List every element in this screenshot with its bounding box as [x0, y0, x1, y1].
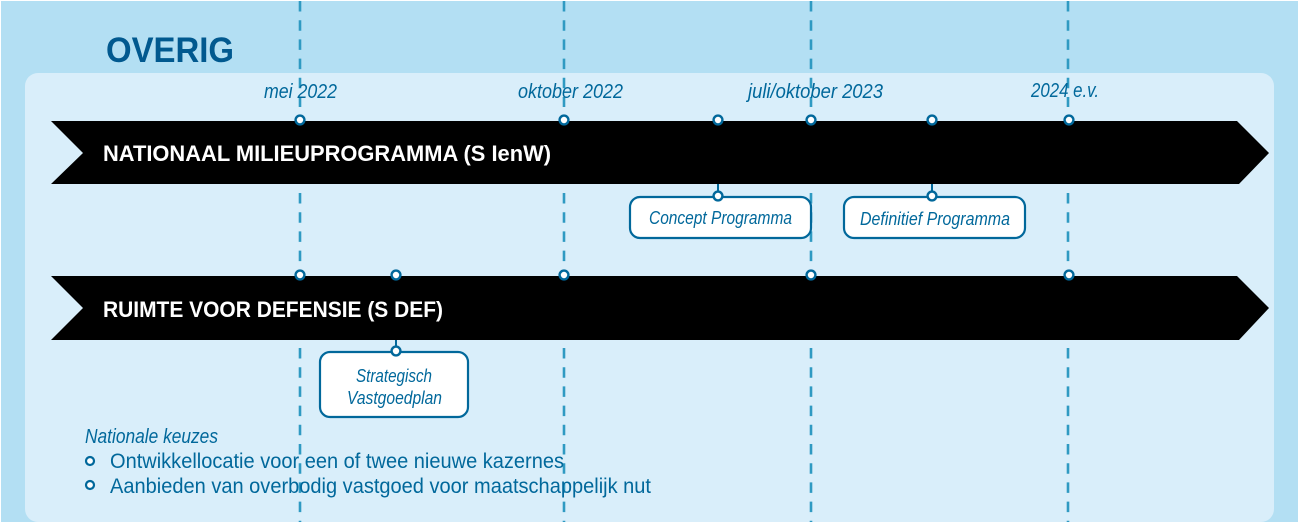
arrow: Ruimte voor Defensie [51, 276, 1269, 340]
callout: Strategisch Vastgoedplan [320, 340, 468, 417]
date labels: juli/oktober 2023 [745, 81, 883, 103]
callout: Concept Programma [630, 184, 811, 238]
text block: Nationale keuzes [85, 426, 651, 498]
date labels: mei 2022 [264, 81, 337, 103]
callout: Definitief Programma [844, 184, 1025, 238]
arrow: Nationaal Milieuprogramma: NATIONAAL MILIEUPROGRAMMA (S IenW) [103, 141, 551, 166]
callout: Concept Programma: Concept Programma [649, 208, 792, 228]
date labels: 2024 e.v. [1030, 80, 1099, 102]
text block: Nationale keuzes: Nationale keuzes [85, 426, 218, 448]
date labels: oktober 2022 [518, 81, 623, 103]
text block: Nationale keuzes: Aanbieden van overbodig vastgoed voor maatschappelijk nut [110, 474, 651, 498]
text block: Nationale keuzes: Ontwikkellocatie voor een of twee nieuwe kazernes [110, 449, 564, 473]
arrow: Ruimte voor Defensie: RUIMTE VOOR DEFENSIE (S DEF) [103, 297, 443, 322]
callout: Strategisch Vastgoedplan: Strategisch [356, 366, 432, 386]
callout: Definitief Programma: Definitief Programma [860, 209, 1010, 229]
arrow: Nationaal Milieuprogramma [51, 121, 1269, 184]
callout: Strategisch Vastgoedplan: Vastgoedplan [347, 388, 442, 408]
title: OVERIG [106, 31, 234, 70]
timeline markers [296, 116, 1073, 279]
date labels [264, 80, 1099, 103]
